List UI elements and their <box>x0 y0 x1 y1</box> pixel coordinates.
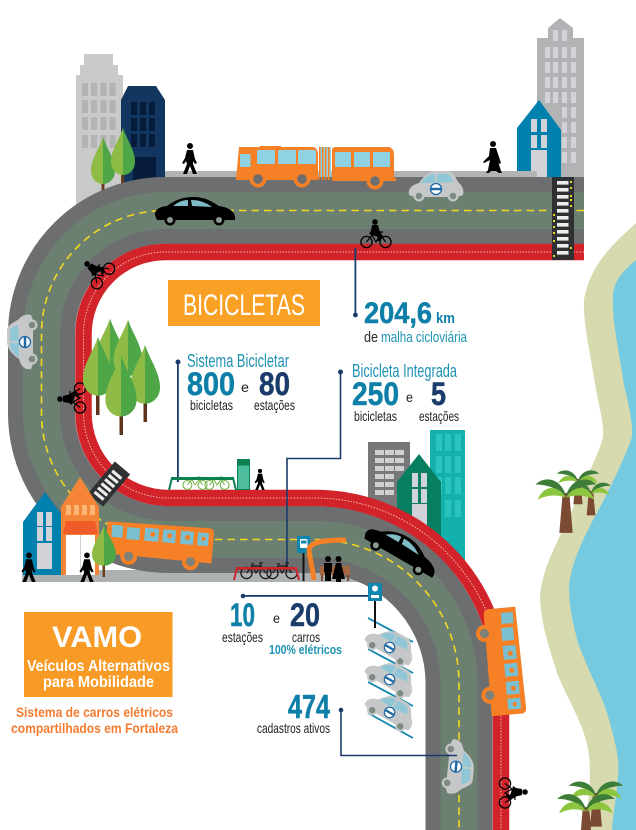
crossing: top right <box>552 177 574 260</box>
stat: Bicicleta Integrada: bicicletas <box>354 408 397 424</box>
parked car 3 <box>361 685 421 736</box>
text: VAMO description <box>11 704 178 736</box>
stat: Sistema Bicicletar <box>187 351 295 413</box>
building: green house <box>397 454 441 540</box>
beach: sand strip <box>540 223 636 830</box>
bike station: red rack <box>234 563 299 580</box>
tree: bottom left <box>92 526 116 577</box>
road <box>42 210 584 830</box>
bus: right curve <box>474 607 527 717</box>
building: navy <box>121 86 165 192</box>
building: blue house right <box>517 100 561 177</box>
trees: top left pair <box>91 128 135 197</box>
leader: VAMO stations <box>241 594 369 598</box>
sidewalk: bottom <box>22 570 359 582</box>
pedestrian: bottom left 2 <box>79 553 94 582</box>
bike station kiosk <box>238 460 250 490</box>
pedestrian: man top <box>182 143 197 174</box>
bike lane <box>83 252 584 830</box>
stat: Sistema Bicicletar: 800 <box>187 366 235 402</box>
crossing: left <box>88 461 130 507</box>
pedestrian: woman top <box>483 141 502 173</box>
parking lines <box>368 618 413 738</box>
stat: VAMO stations and cars: 10 <box>230 597 255 633</box>
heading: VAMO: para Mobilidade <box>43 674 154 691</box>
houses: bottom left <box>23 477 99 575</box>
car: silver bottom road <box>441 738 477 796</box>
cyclist: left <box>57 383 86 413</box>
leader: cadastros <box>339 708 457 756</box>
stat: malha cicloviaria: de <box>364 330 378 346</box>
parked car 2 <box>361 652 421 703</box>
bus: articulated top <box>236 146 396 190</box>
stat: Sistema Bicicletar: estações <box>254 397 295 413</box>
stat: VAMO stations and cars: 20 <box>290 597 320 633</box>
stat: VAMO stations and cars: estações <box>222 629 263 645</box>
pedestrian: near kiosk <box>255 469 265 490</box>
building: teal tower <box>430 430 465 575</box>
stat: malha cicloviaria: 204,6 <box>364 297 432 330</box>
stat: Bicicleta Integrada <box>352 361 459 424</box>
car: silver top <box>409 171 463 202</box>
beach: sea <box>569 260 636 830</box>
heading: VAMO: Veículos Alternativos <box>27 658 170 675</box>
stat: malha cicloviaria: km <box>436 310 455 327</box>
cyclist: bottom right <box>499 778 528 808</box>
bus: bottom road <box>104 519 214 572</box>
stat: Bicicleta Integrada: Bicicleta Integrada <box>352 361 458 381</box>
leader dot <box>338 370 343 374</box>
bus stop sign <box>297 536 310 581</box>
sidewalk: top <box>165 171 537 178</box>
stat: Bicicleta Integrada: 250 <box>352 376 399 412</box>
stat: cadastros ativos: cadastros ativos <box>257 720 330 736</box>
text: VAMO description: Sistema de carros elétricos <box>16 704 173 720</box>
stat: Sistema Bicicletar: e <box>241 379 249 395</box>
car: black top <box>155 197 235 226</box>
stat: Sistema Bicicletar: Sistema Bicicletar <box>187 351 289 371</box>
heading: BICICLETAS: BICICLETAS <box>183 289 305 322</box>
stat: VAMO stations and cars: e <box>273 610 280 626</box>
car: black centre <box>360 518 444 583</box>
building: grey block centre <box>368 442 410 512</box>
stat: malha cicloviaria: malha cicloviária <box>381 330 468 346</box>
stat: Sistema Bicicletar: 80 <box>259 366 290 402</box>
stat: malha cicloviaria <box>364 297 468 346</box>
stat: Bicicleta Integrada: estações <box>419 408 459 424</box>
bike station: green rack <box>169 477 236 490</box>
car: silver left <box>7 315 38 369</box>
stat: Bicicleta Integrada: 5 <box>431 376 446 412</box>
cyclist: upper left <box>76 250 117 291</box>
trees: central group <box>83 319 160 435</box>
leader: malha cicloviaria <box>353 248 358 317</box>
stat: cadastros ativos: 474 <box>288 688 330 725</box>
heading: VAMO: VAMO <box>52 621 142 654</box>
stat: VAMO stations and cars: 100% elétricos <box>269 642 342 657</box>
stat: Bicicleta Integrada: e <box>406 389 413 405</box>
leader: Sistema Bicicletar <box>176 360 180 482</box>
heading: BICICLETAS <box>168 280 320 326</box>
heading: VAMO <box>24 612 172 697</box>
leader: Bicicleta Integrada <box>287 372 340 568</box>
stat: cadastros ativos <box>257 688 330 736</box>
cyclist: top <box>361 219 391 248</box>
VAMO sign <box>368 583 382 628</box>
palm cluster upper <box>536 470 611 533</box>
palm cluster lower <box>557 782 623 830</box>
bus shelter <box>309 540 346 580</box>
text: VAMO description: compartilhados em Fortaleza <box>11 720 178 736</box>
parked car 1 <box>361 620 421 671</box>
bench with people <box>320 556 350 582</box>
stat: Sistema Bicicletar: bicicletas <box>190 397 233 413</box>
building: grey tower right <box>537 18 584 177</box>
pedestrian: bottom left 1 <box>21 553 36 582</box>
building: grey tower left <box>76 54 123 215</box>
stat: VAMO stations and cars <box>222 597 342 657</box>
stat: VAMO stations and cars: carros <box>292 629 320 645</box>
